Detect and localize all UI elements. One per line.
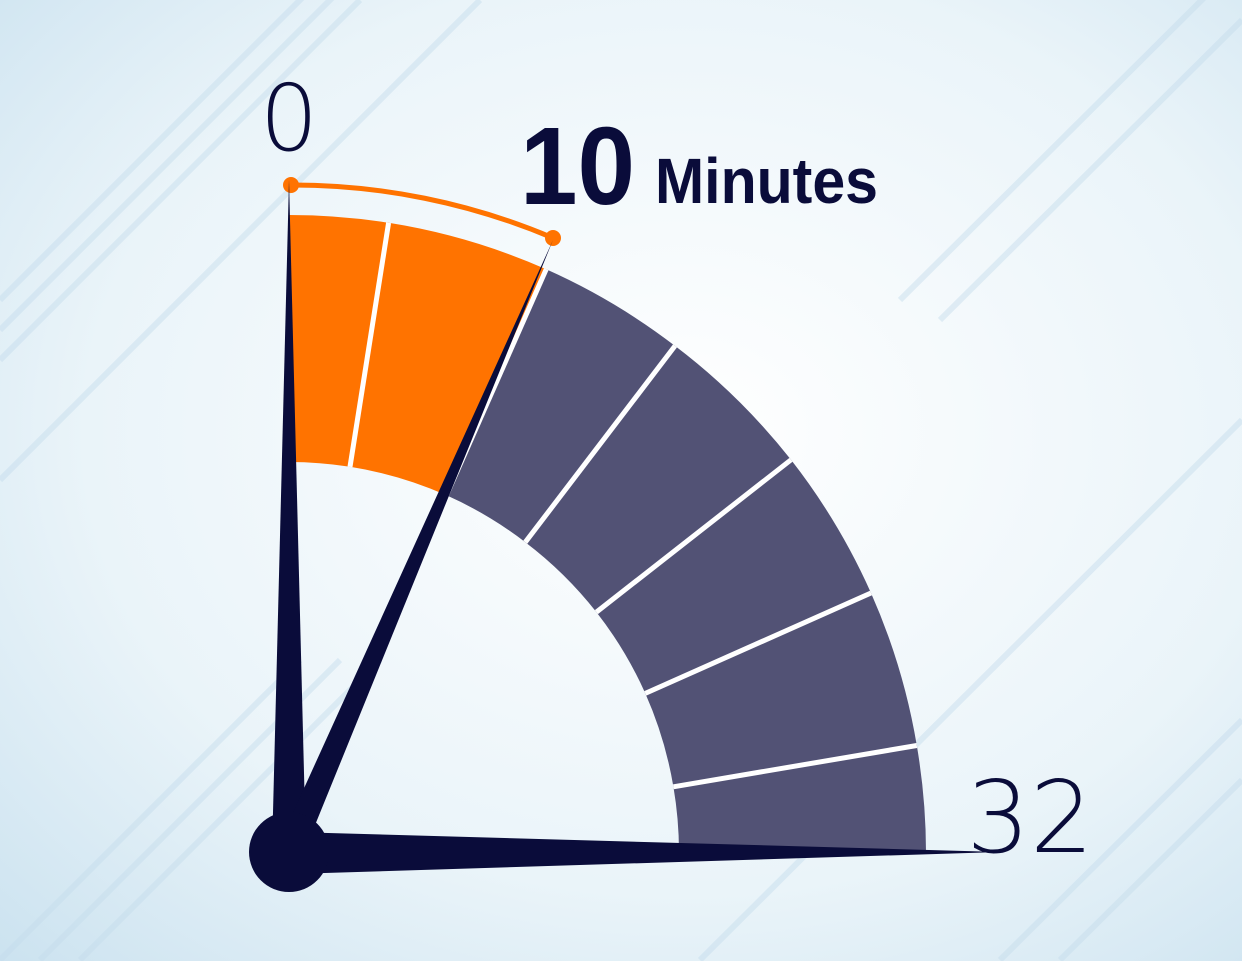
hub xyxy=(249,812,329,892)
needles xyxy=(249,180,1000,892)
label: 10 Minutes: Minutes xyxy=(655,145,878,217)
label: 10 Minutes xyxy=(520,105,878,228)
label: 32: 32 xyxy=(966,759,1094,876)
label: 10 Minutes: 10 xyxy=(520,105,635,228)
orange arc indicator xyxy=(283,177,561,246)
label: 0: 0 xyxy=(260,65,318,172)
gauge segments xyxy=(289,215,926,852)
